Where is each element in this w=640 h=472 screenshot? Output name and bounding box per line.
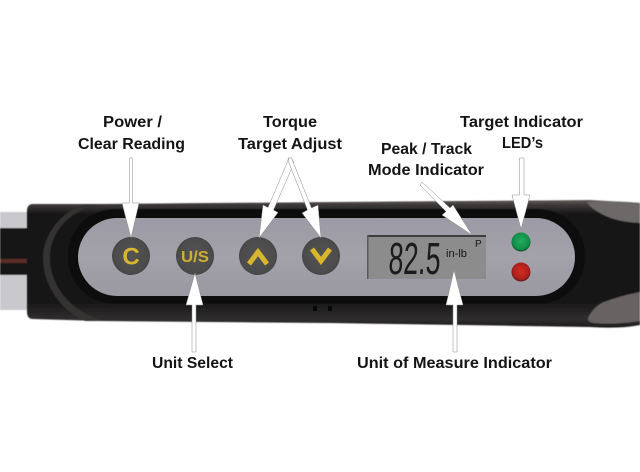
arrows: torque target adjust [259,158,321,238]
label: target adjust: Target Adjust [238,136,343,153]
panel bezel [68,209,585,304]
grip patch: bottom [588,292,640,324]
left collar ridge [43,204,105,321]
label: clear reading: Clear Reading [78,136,185,153]
arrow: unit select [186,273,203,352]
wrench shaft on the left [0,212,30,310]
LCD mode: P [475,239,482,250]
button: up [239,237,277,275]
label: torque: Torque [263,114,317,131]
vent holes [313,306,332,311]
LCD reading: 82.5 [388,234,442,285]
grip patch: top [587,201,640,223]
label: mode indicator: Mode Indicator [368,162,484,179]
label: power: Power / [103,114,163,131]
button: unit select [176,237,214,275]
label: target indicator: Target Indicator [460,114,583,131]
arrow: unit of measure [446,270,463,352]
LED: red [512,262,530,282]
wrench body [27,200,640,328]
button: unit select: U/S [181,249,209,266]
label: LEDs: LED’s [502,135,543,152]
button: power / clear [112,237,150,275]
label: unit select: Unit Select [152,355,234,372]
label: peak / track: Peak / Track [381,141,472,158]
button: down [302,237,340,275]
LED: green [512,232,530,252]
label: unit of measure: Unit of Measure Indicator [357,355,552,372]
button: power / clear: C [122,244,140,270]
arrow: LED [512,158,530,229]
LCD display [367,234,486,285]
grey control panel [78,218,575,296]
LCD unit: in-lb [446,248,467,260]
arrow: peak / track [420,182,472,235]
arrow: power [122,158,139,238]
